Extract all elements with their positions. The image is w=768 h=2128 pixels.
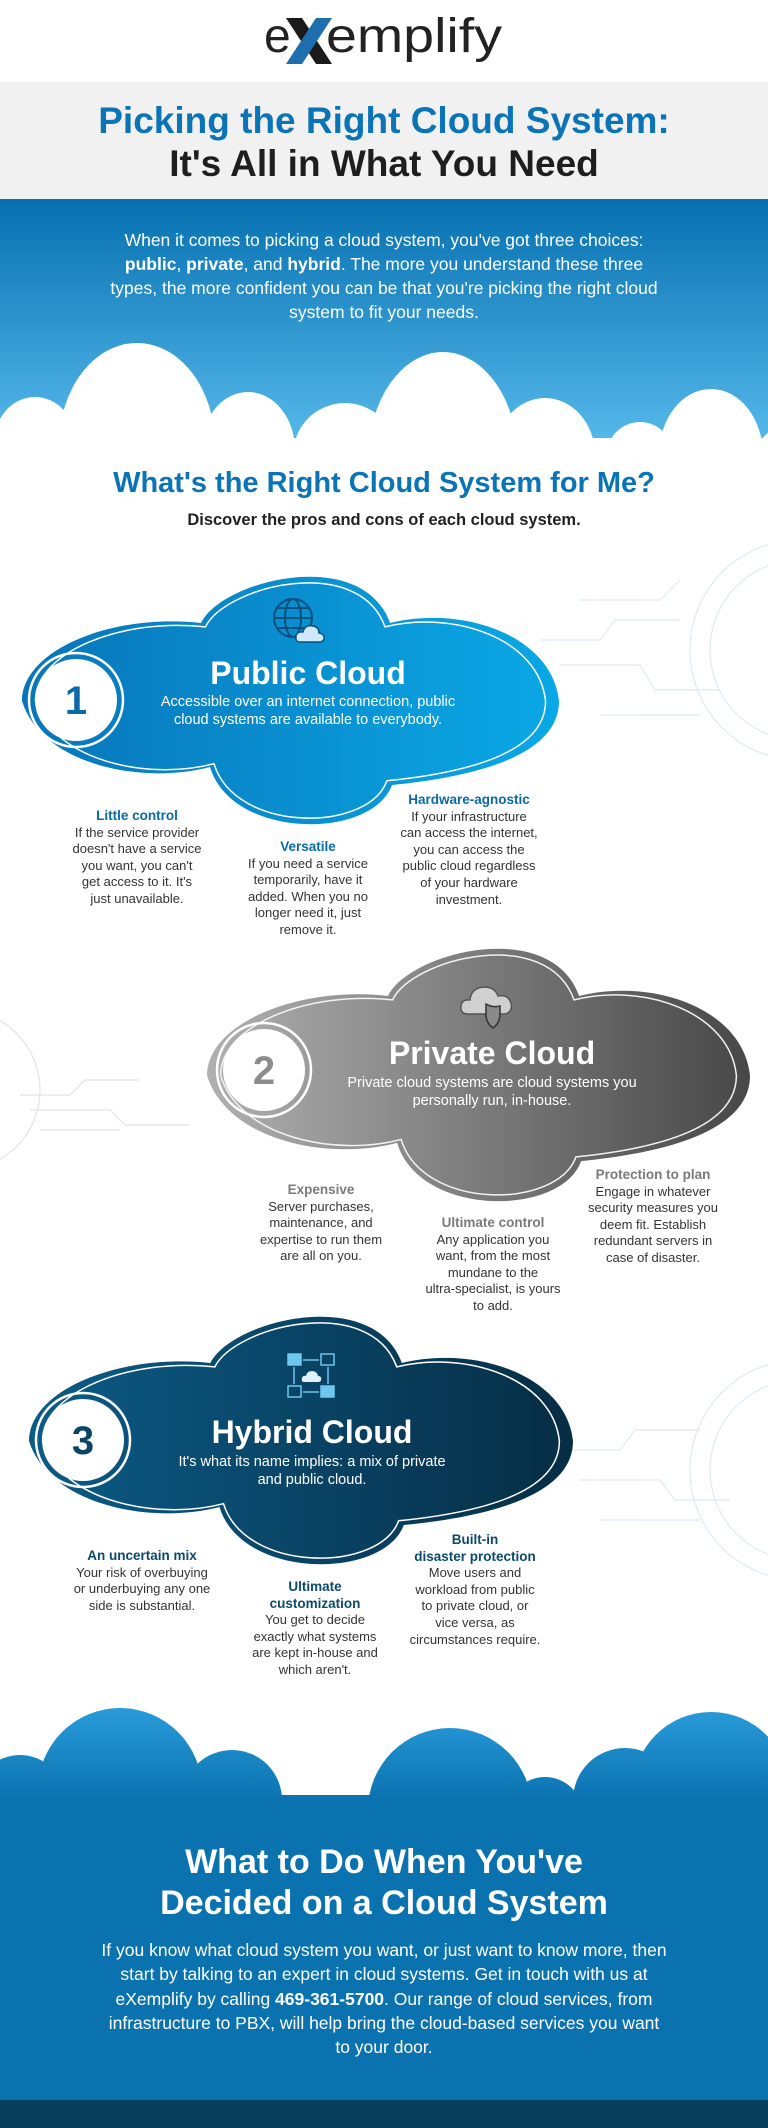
- logo: [264, 10, 502, 64]
- number circle 3: [34, 1392, 132, 1488]
- hybrid title: Hybrid Cloud: [212, 1414, 412, 1450]
- column: built-in disaster protection: vice versa, as: [435, 1615, 515, 1630]
- closing text: eXemplify by calling 469-361-5700. Our range of cloud services, from: [116, 1989, 652, 2009]
- column: ultimate customization: You get to decide: [265, 1612, 365, 1627]
- column: ultimate control: ultra-specialist, is yours: [425, 1281, 561, 1296]
- column: uncertain mix: side is substantial.: [89, 1598, 195, 1613]
- logo: emplify: [326, 10, 502, 63]
- public title: Public Cloud: [210, 655, 406, 691]
- column: versatile: [248, 839, 368, 937]
- closing heading: [160, 1843, 608, 1922]
- column: built-in disaster protection: disaster protection: [414, 1549, 536, 1564]
- number circle 1: [28, 652, 124, 748]
- column: protection to plan: deem fit. Establish: [600, 1217, 706, 1232]
- private description: [347, 1075, 637, 1109]
- closing heading: Decided on a Cloud System: [160, 1884, 608, 1922]
- column: hardware-agnostic: Hardware-agnostic: [408, 792, 530, 807]
- footer bar: [0, 2100, 768, 2128]
- column: uncertain mix: An uncertain mix: [87, 1548, 197, 1563]
- intro blue band with clouds: [0, 199, 768, 438]
- column: ultimate customization: which aren't.: [279, 1662, 351, 1677]
- logo: e: [264, 10, 291, 63]
- closing text: If you know what cloud system you want, or just want to know more, then: [101, 1940, 667, 1960]
- column: built-in disaster protection: circumstances require.: [410, 1632, 540, 1647]
- column: hardware-agnostic: [400, 792, 538, 907]
- column: ultimate control: mundane to the: [448, 1265, 538, 1280]
- column: expensive: [260, 1182, 382, 1263]
- intro text: system to fit your needs.: [289, 302, 479, 322]
- number circle 2: [216, 1022, 312, 1118]
- column: hardware-agnostic: If your infrastructure: [411, 809, 527, 824]
- closing text: [101, 1940, 667, 2057]
- section subtitle: Discover the pros and cons of each cloud system.: [187, 511, 581, 529]
- column: versatile: longer need it, just: [255, 905, 361, 920]
- column: built-in disaster protection: Move users and: [429, 1565, 521, 1580]
- column: little control: doesn't have a service: [73, 841, 201, 856]
- column: ultimate customization: Ultimate: [288, 1579, 342, 1594]
- column: little control: Little control: [96, 808, 178, 823]
- intro text: types, the more confident you can be that you're picking the right cloud: [110, 278, 658, 298]
- column: ultimate control: Ultimate control: [442, 1215, 544, 1230]
- private title: Private Cloud: [389, 1035, 595, 1071]
- closing text: infrastructure to PBX, will help bring the cloud-based services you want: [109, 2013, 659, 2033]
- title band: [0, 82, 768, 199]
- column: uncertain mix: Your risk of overbuying: [76, 1565, 208, 1580]
- column: expensive: Server purchases,: [268, 1199, 374, 1214]
- column: ultimate customization: customization: [270, 1596, 360, 1611]
- column: hardware-agnostic: of your hardware: [420, 875, 518, 890]
- icon: hybrid network: [287, 1353, 335, 1398]
- column: expensive: are all on you.: [280, 1248, 362, 1263]
- closing text: start by talking to an expert in cloud systems. Get in touch with us at: [120, 1964, 648, 1984]
- column: expensive: expertise to run them: [260, 1232, 382, 1247]
- column: protection to plan: Engage in whatever: [596, 1184, 710, 1199]
- cloud shape hybrid: [29, 1316, 573, 1564]
- column: ultimate customization: exactly what systems: [254, 1629, 376, 1644]
- bottom blue section with clouds: [0, 1708, 768, 2128]
- column: versatile: added. When you no: [248, 889, 368, 904]
- hybrid description: and public cloud.: [258, 1472, 366, 1488]
- column: ultimate customization: [252, 1579, 378, 1677]
- panel: hybrid cloud: [29, 1316, 573, 1564]
- column: ultimate control: want, from the most: [436, 1248, 550, 1263]
- intro text: public, private, and hybrid. The more you understand these three: [125, 254, 643, 274]
- number circle 3: 3: [72, 1419, 94, 1463]
- panel: private cloud: [207, 948, 750, 1202]
- public description: [160, 694, 455, 728]
- column: versatile: temporarily, have it: [254, 872, 362, 887]
- public description: Accessible over an internet connection, public: [161, 694, 455, 710]
- closing text: to your door.: [335, 2037, 433, 2057]
- column: little control: you want, you can't: [82, 858, 192, 873]
- column: built-in disaster protection: Built-in: [452, 1532, 498, 1547]
- column: ultimate control: to add.: [473, 1298, 513, 1313]
- column: built-in disaster protection: to private cloud, or: [422, 1598, 528, 1613]
- column: little control: just unavailable.: [90, 891, 184, 906]
- public description: cloud systems are available to everybody.: [174, 712, 442, 728]
- hybrid description: [178, 1454, 446, 1488]
- column: protection to plan: Protection to plan: [596, 1167, 710, 1182]
- panel: public cloud: [22, 576, 559, 824]
- column: protection to plan: security measures you: [588, 1200, 718, 1215]
- column: hardware-agnostic: can access the internet,: [400, 825, 538, 840]
- column: hardware-agnostic: investment.: [436, 892, 502, 907]
- icon: cloud with shield: [460, 986, 512, 1029]
- title band: Picking the Right Cloud System:: [98, 100, 670, 141]
- number circle 2: 2: [253, 1049, 275, 1093]
- column: little control: get access to it. It's: [82, 874, 192, 889]
- column: built-in disaster protection: workload from public: [415, 1582, 535, 1597]
- intro text: [110, 230, 658, 322]
- private description: Private cloud systems are cloud systems you: [347, 1075, 637, 1091]
- column: protection to plan: redundant servers in: [594, 1233, 712, 1248]
- title band: It's All in What You Need: [169, 143, 599, 184]
- hybrid description: It's what its name implies: a mix of private: [178, 1454, 446, 1470]
- private description: personally run, in-house.: [413, 1093, 571, 1109]
- column: versatile: Versatile: [280, 839, 336, 854]
- number circle 1: 1: [65, 679, 87, 723]
- cloud shape private: [207, 948, 750, 1202]
- intro text: When it comes to picking a cloud system, you've got three choices:: [125, 230, 643, 250]
- column: expensive: maintenance, and: [269, 1215, 373, 1230]
- column: versatile: If you need a service: [248, 856, 368, 871]
- column: protection to plan: [588, 1167, 718, 1265]
- column: ultimate control: [425, 1215, 561, 1313]
- column: hardware-agnostic: you can access the: [413, 842, 525, 857]
- column: ultimate control: Any application you: [437, 1232, 549, 1247]
- column: ultimate customization: are kept in-house and: [252, 1645, 378, 1660]
- column: versatile: remove it.: [279, 922, 337, 937]
- column: expensive: Expensive: [288, 1182, 354, 1197]
- column: little control: If the service provider: [75, 825, 199, 840]
- column: little control: [73, 808, 201, 906]
- column: uncertain mix: or underbuying any one: [74, 1581, 210, 1596]
- column: uncertain mix: [74, 1548, 210, 1613]
- column: built-in disaster protection: [410, 1532, 540, 1647]
- column: protection to plan: case of disaster.: [606, 1250, 700, 1265]
- section heading: What's the Right Cloud System for Me?: [113, 467, 655, 499]
- column: hardware-agnostic: public cloud regardless: [403, 858, 535, 873]
- closing heading: What to Do When You've: [185, 1843, 583, 1881]
- cloud shape public: [22, 576, 559, 824]
- icon: globe with cloud: [273, 598, 325, 643]
